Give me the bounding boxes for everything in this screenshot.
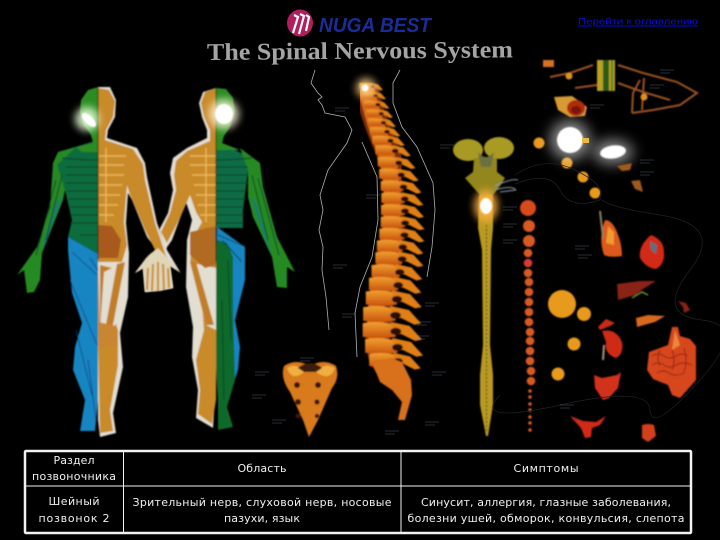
green head bbox=[76, 87, 98, 152]
sacrum front view bbox=[283, 362, 337, 437]
green torso bbox=[56, 140, 98, 254]
highlight: glowing glands bbox=[550, 120, 633, 164]
stomach and intestines bbox=[647, 327, 696, 398]
pelvis bbox=[98, 225, 121, 258]
back thigh white bbox=[188, 262, 216, 330]
back segment lines bbox=[216, 158, 279, 400]
table bbox=[25, 451, 691, 533]
back bone and nerve orange bbox=[161, 88, 216, 424]
highlight: cord glow bbox=[474, 190, 498, 222]
artery cross-section bbox=[554, 96, 587, 117]
row: area: Зрительный нерв, слуховой нерв, носовые bbox=[132, 496, 392, 509]
pancreas bbox=[636, 315, 665, 327]
blue leg bbox=[68, 237, 98, 431]
cord bbox=[478, 195, 493, 436]
spleen bbox=[678, 301, 690, 313]
logo wordmark: NUGA BEST bbox=[319, 15, 433, 37]
cerebellum bbox=[453, 139, 483, 161]
nerve branches bbox=[550, 65, 697, 113]
uterus bbox=[570, 416, 606, 438]
title: The Spinal Nervous System bbox=[207, 37, 513, 66]
nerve diagram top right bbox=[543, 60, 697, 117]
header: section: Раздел bbox=[54, 454, 94, 467]
row: section: Шейный bbox=[48, 495, 100, 508]
spinal cord with brain stem bbox=[453, 137, 518, 436]
spinal segment cross-section bbox=[597, 60, 615, 91]
segment dots column bbox=[520, 200, 536, 432]
spine lateral view bbox=[356, 78, 425, 420]
kidney bbox=[602, 330, 622, 358]
row: section: позвонок 2 bbox=[38, 512, 110, 525]
header logo bbox=[287, 10, 433, 37]
green arm and hand bbox=[17, 147, 76, 293]
row: area: пазухи, язык bbox=[224, 512, 300, 525]
header: section: позвоночника bbox=[32, 470, 116, 483]
liver bbox=[617, 281, 656, 300]
figure: back body dermatomes and nerves bbox=[159, 88, 295, 430]
bladder bbox=[594, 372, 621, 400]
blue segment lines bbox=[70, 252, 98, 420]
brain stem bbox=[465, 158, 505, 196]
side body outline bbox=[311, 70, 435, 357]
back green torso bbox=[216, 140, 260, 228]
clasped hands bbox=[135, 248, 181, 292]
header: symptoms: Симптомы bbox=[514, 462, 578, 475]
cord branches bbox=[495, 180, 518, 192]
highlight: back head glow bbox=[209, 99, 239, 129]
small annotation marks bbox=[252, 70, 674, 434]
back green head bbox=[216, 88, 240, 150]
organs bbox=[570, 163, 696, 442]
row: symptoms: Синусит, аллергия, глазные заболевания, bbox=[421, 496, 671, 509]
lung bbox=[601, 220, 622, 257]
row: symptoms: болезни ушей, обморок, конвульсия, слепота bbox=[408, 512, 684, 525]
green segment lines bbox=[36, 158, 98, 255]
sacrum and coccyx bbox=[372, 358, 412, 420]
link to contents: Перейти к оглавлению bbox=[578, 16, 698, 28]
gall duct bbox=[632, 292, 648, 298]
table text bbox=[32, 454, 684, 525]
bone half white base bbox=[98, 87, 180, 437]
figure: front body dermatomes and nerves bbox=[17, 87, 180, 437]
small glands near eye bbox=[617, 163, 643, 192]
fine nerve fibres bbox=[493, 164, 720, 418]
back bone half white base bbox=[159, 88, 216, 428]
vertebrae bbox=[359, 83, 425, 370]
table grid bbox=[25, 451, 691, 533]
header: area: Область bbox=[238, 462, 286, 475]
highlight: front face glow bbox=[70, 102, 104, 136]
cervical glow bbox=[356, 78, 376, 98]
bone and nerve orange bbox=[98, 88, 168, 433]
thigh white bbox=[98, 262, 126, 330]
heart bbox=[640, 235, 664, 269]
back pelvis bbox=[190, 226, 216, 268]
rectum bbox=[642, 424, 656, 442]
ganglia bbox=[534, 138, 600, 380]
back green arm and hand bbox=[240, 148, 295, 288]
adrenal bbox=[598, 319, 615, 330]
back dark green leg bbox=[216, 240, 235, 430]
spine body core bbox=[366, 88, 396, 365]
logo emblem bbox=[287, 10, 313, 36]
ribs bbox=[99, 148, 126, 222]
back outer blue leg bbox=[216, 227, 245, 385]
